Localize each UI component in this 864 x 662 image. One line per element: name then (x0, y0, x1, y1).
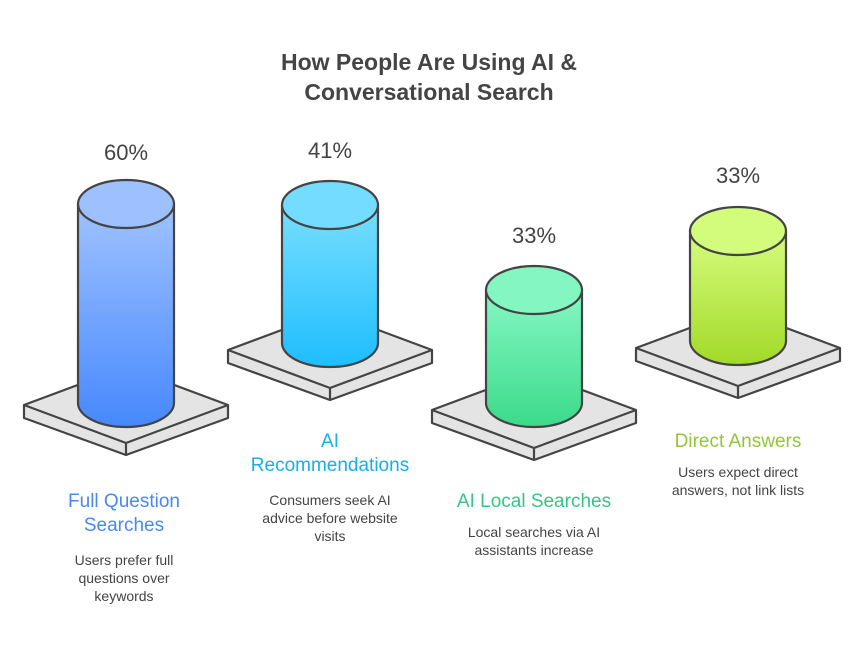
label: full question searches (68, 491, 180, 604)
title: How People Are Using AI & (281, 49, 577, 75)
label: AI recommendations: advice before website (262, 510, 398, 526)
percentages: 33% (716, 163, 760, 188)
label: direct answers: Direct Answers (675, 431, 801, 452)
label: AI recommendations: Consumers seek AI (269, 492, 391, 508)
label: AI recommendations: visits (314, 528, 346, 544)
label: full question searches: questions over (78, 570, 170, 586)
percentages: 41% (308, 138, 352, 163)
bar 2: AI recommendations 41% (228, 181, 432, 400)
label: full question searches: keywords (94, 588, 154, 604)
title: Conversational Search (304, 79, 554, 105)
label: direct answers: answers, not link lists (672, 482, 804, 498)
label: AI local searches (457, 491, 611, 558)
label: AI local searches: assistants increase (474, 542, 594, 558)
label: direct answers (672, 431, 804, 498)
bar 1: full question searches 60% (24, 180, 228, 455)
label: AI recommendations: Recommendations (251, 455, 409, 476)
percentages: 33% (512, 223, 556, 248)
label: AI local searches: Local searches via AI (468, 524, 600, 540)
label: direct answers: Users expect direct (678, 464, 798, 480)
title (281, 49, 577, 105)
label: AI recommendations (251, 431, 409, 544)
label: AI local searches: AI Local Searches (457, 491, 611, 512)
percentages: 60% (104, 140, 148, 165)
percentages (104, 138, 760, 248)
label: full question searches: Searches (84, 515, 164, 536)
label: AI recommendations: AI (321, 431, 339, 452)
label: full question searches: Full Question (68, 491, 180, 512)
label: full question searches: Users prefer full (75, 552, 173, 568)
bar 3: AI local searches 33% (432, 266, 636, 460)
bar 4: direct answers 33% (636, 207, 840, 398)
